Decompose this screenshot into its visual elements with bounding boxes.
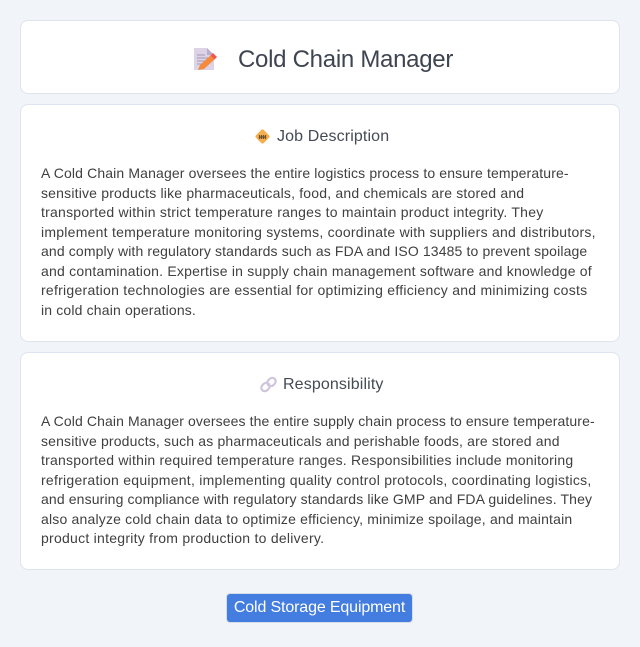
text: responsibility body: also analyze cold chain data to optimize efficiency, minimize spoilage, and maintain [41,510,572,526]
text: job description body: implement temperature monitoring systems, coordinate with suppliers and distributors, [41,224,596,240]
text: responsibility body: transported within required temperature ranges. Responsibilities include monitoring [41,452,573,468]
text: responsibility body: refrigeration equipment, implementing quality control protocols, coordinating logistics, [41,472,591,488]
panel: job description [20,104,620,342]
icon: chain link [260,376,277,392]
text: job description body: transported within strict temperature ranges to maintain product integrity. They [41,204,543,220]
text: responsibility body: and ensuring compliance with regulatory standards like GMP and FDA guidelines. They [41,491,592,507]
panel: responsibility [20,352,620,570]
panel: title card [20,20,620,94]
text: responsibility body: sensitive products, such as pharmaceuticals and perishable foods, are stored and [41,432,560,448]
button: cold storage equipment: Cold Storage Equipment [234,599,405,616]
icon: document with pencil [194,48,217,70]
text: responsibility body: product integrity from production to delivery. [41,530,324,546]
text: job description body: and comply with regulatory standards such as FDA and ISO 13485 to prevent spoilage [41,243,587,259]
button: cold storage equipment [226,593,413,623]
text: job description body: sensitive products like pharmaceuticals, food, and chemicals are stored and [41,184,524,200]
icon: diamond sign [256,129,270,144]
text: job description body [41,165,596,318]
text: job description body: and contamination. Expertise in supply chain management software and knowledge of [41,262,592,278]
title: Cold Chain Manager [238,46,453,72]
text: responsibility body [41,413,595,546]
text: job description body: in cold chain operations. [41,302,196,318]
heading: responsibility: Responsibility [283,376,384,393]
text: job description body: refrigeration technologies are essential for optimizing efficiency and minimizing costs [41,282,587,298]
text: job description body: A Cold Chain Manager oversees the entire logistics process to ensure temperature- [41,165,569,181]
heading: job description: Job Description [277,128,389,145]
text: responsibility body: A Cold Chain Manager oversees the entire supply chain process to ensure temperature- [41,413,595,429]
